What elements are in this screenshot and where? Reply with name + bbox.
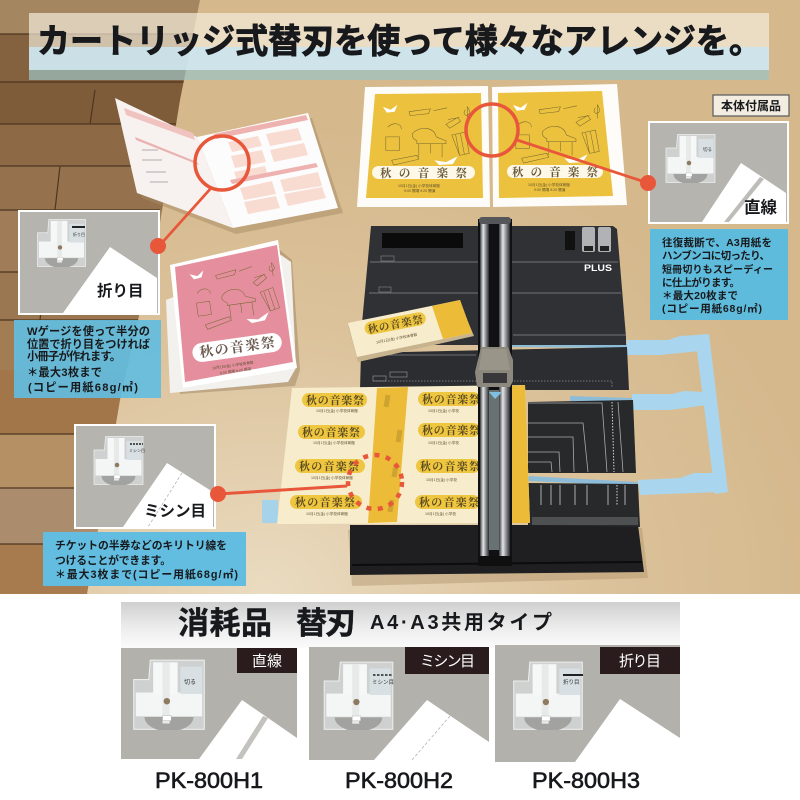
text block: straight blade (650, 229, 788, 320)
ticket sheet: 秋の音楽祭 (420, 459, 480, 473)
text block: straight blade: ハンブンコに切ったり、 (662, 249, 770, 262)
text block: fold blade: Wゲージを使って半分の (27, 324, 150, 338)
panel: fold blade (19, 211, 159, 314)
ticket sheet: 10月1日(金) 小学校体育館 (313, 440, 355, 445)
ticket stack: 10月1日(金) 小学校体育館 (376, 332, 418, 345)
yellow poster right: 10月1日(金) 小学校体育館 (528, 182, 570, 187)
background: desk surface (87, 0, 800, 594)
panel: perforation blade: ミシン目 (144, 503, 206, 520)
label: included with body (713, 95, 789, 116)
product card: PK-800H3 (495, 645, 680, 762)
text block: perforation blade: チケットの半券などのキリトリ線を (55, 538, 227, 552)
yellow poster left: 9:00 開場 9:20 開演 (404, 188, 436, 193)
panel: fold blade: 折り目 (73, 231, 85, 237)
label: included with body: 本体付属品 (721, 98, 781, 113)
panel: perforation blade (75, 425, 215, 528)
product card: PK-800H1: 切る (184, 679, 196, 686)
product card: PK-800H1 (121, 648, 297, 759)
header: consumables (121, 602, 680, 648)
product card: PK-800H2: ミシン目 (372, 679, 394, 686)
trimmer: blue extension arms (510, 334, 728, 495)
pink booklet (166, 240, 300, 394)
text block: fold blade: (コピー用紙68g/㎡) (28, 380, 138, 394)
product card: PK-800H3: 折り目 (563, 678, 580, 686)
panel: straight blade (649, 122, 788, 223)
text block: perforation blade (43, 532, 246, 586)
header: consumables: A4·A3共用タイプ (370, 611, 552, 634)
trimmer: upper plate (360, 226, 626, 345)
yellow poster right: 秋の音楽祭 (512, 165, 598, 179)
panel: perforation blade: ミシン目 (129, 448, 145, 453)
ticket sheet: 10月1日(金) 小学校 (426, 477, 457, 482)
ticket sheet: 秋の音楽祭 (422, 392, 480, 406)
pink booklet: 10月1日(金) 小学校体育館 (212, 360, 254, 370)
text block: fold blade: 小冊子が作れます。 (27, 349, 121, 363)
callout: dashed red circle on tickets (210, 455, 402, 509)
trimmer: shadow and base (348, 525, 648, 586)
ticket stack: 秋の音楽祭 (367, 313, 425, 336)
text block: straight blade: 短冊切りもスピーディー (662, 263, 773, 276)
title band (29, 13, 769, 80)
brochure with fold (115, 98, 343, 234)
ticket sheet: 10月1日(金) 小学校 (428, 408, 459, 413)
product card: PK-800H2 (309, 647, 489, 760)
ticket sheet: 秋の音楽祭 (299, 459, 359, 473)
bottom section background (0, 594, 800, 800)
ticket sheet: 10月1日(金) 小学校体育館 (316, 408, 358, 413)
blue paper stop (262, 500, 278, 523)
text block: straight blade: に仕上がります。 (662, 276, 740, 289)
yellow poster left (357, 86, 490, 207)
ticket sheet: 10月1日(金) 小学校 (425, 511, 456, 516)
title: カートリッジ式替刃を使って様々なアレンジを。 (37, 23, 762, 61)
product card: PK-800H1: 直線 (252, 653, 282, 670)
ticket sheet: 秋の音楽祭 (302, 425, 360, 439)
text block: straight blade: (コピー用紙68g/㎡) (662, 302, 762, 315)
ticket sheet: 秋の音楽祭 (295, 495, 355, 509)
panel: straight blade: 直線 (744, 198, 778, 217)
ticket sheet: 10月1日(金) 小学校体育館 (311, 475, 353, 480)
panel: fold blade: 折り目 (97, 282, 144, 300)
ticket sheet: 秋の音楽祭 (419, 495, 479, 509)
trimmer: second plate (360, 347, 629, 390)
ticket sheet: 10月1日(金) 小学校体育館 (306, 511, 348, 516)
trimmer: fourth plate with ticks (528, 483, 640, 527)
ticket sheet: 10月1日(金) 小学校 (428, 440, 459, 445)
product card: PK-800H2: ミシン目 (420, 653, 475, 670)
panel: straight blade: 切る (703, 146, 712, 153)
callout: red circle on posters (466, 104, 656, 191)
yellow poster right: 9:00 開場 9:20 開演 (534, 187, 566, 192)
trimmer: cutting rail (478, 217, 512, 566)
product code: PK-800H1: PK-800H1 (155, 768, 263, 793)
text block: fold blade: 位置で折り目をつければ (27, 337, 150, 351)
pink booklet: 9:00 開場 9:20 開演 (220, 366, 252, 375)
trimmer: slider (475, 347, 513, 399)
text block: straight blade: 往復裁断で、A3用紙を (662, 236, 772, 249)
header: consumables: 消耗品 (178, 606, 272, 641)
product code: PK-800H2: PK-800H2 (345, 768, 453, 793)
yellow poster right (492, 84, 627, 207)
yellow poster left: 10月1日(金) 小学校体育館 (398, 183, 440, 188)
trimmer: upper plate: PLUS (584, 263, 612, 273)
text block: fold blade (14, 320, 161, 398)
header: consumables: 替刃 (296, 606, 356, 641)
text block: fold blade: ＊最大3枚まで (27, 365, 102, 379)
ticket stack (348, 300, 474, 362)
background: wood floor (0, 0, 260, 594)
product card: PK-800H3: 折り目 (619, 653, 661, 670)
yellow poster left: 秋の音楽祭 (380, 166, 468, 180)
callout: red circle on brochure (150, 136, 249, 254)
ticket sheet (277, 385, 530, 524)
text block: straight blade: ＊最大20枚まで (662, 289, 738, 302)
ticket sheet: 秋の音楽祭 (422, 423, 480, 437)
text block: perforation blade: ＊最大3枚まで(コピー用紙68g/㎡) (55, 567, 238, 581)
trimmer: third plate with guides (528, 400, 636, 473)
product code: PK-800H3: PK-800H3 (532, 768, 640, 793)
pink booklet: 秋の音楽祭 (198, 334, 276, 361)
text block: perforation blade: つけることができます。 (55, 553, 171, 567)
ticket sheet: 秋の音楽祭 (306, 393, 364, 407)
